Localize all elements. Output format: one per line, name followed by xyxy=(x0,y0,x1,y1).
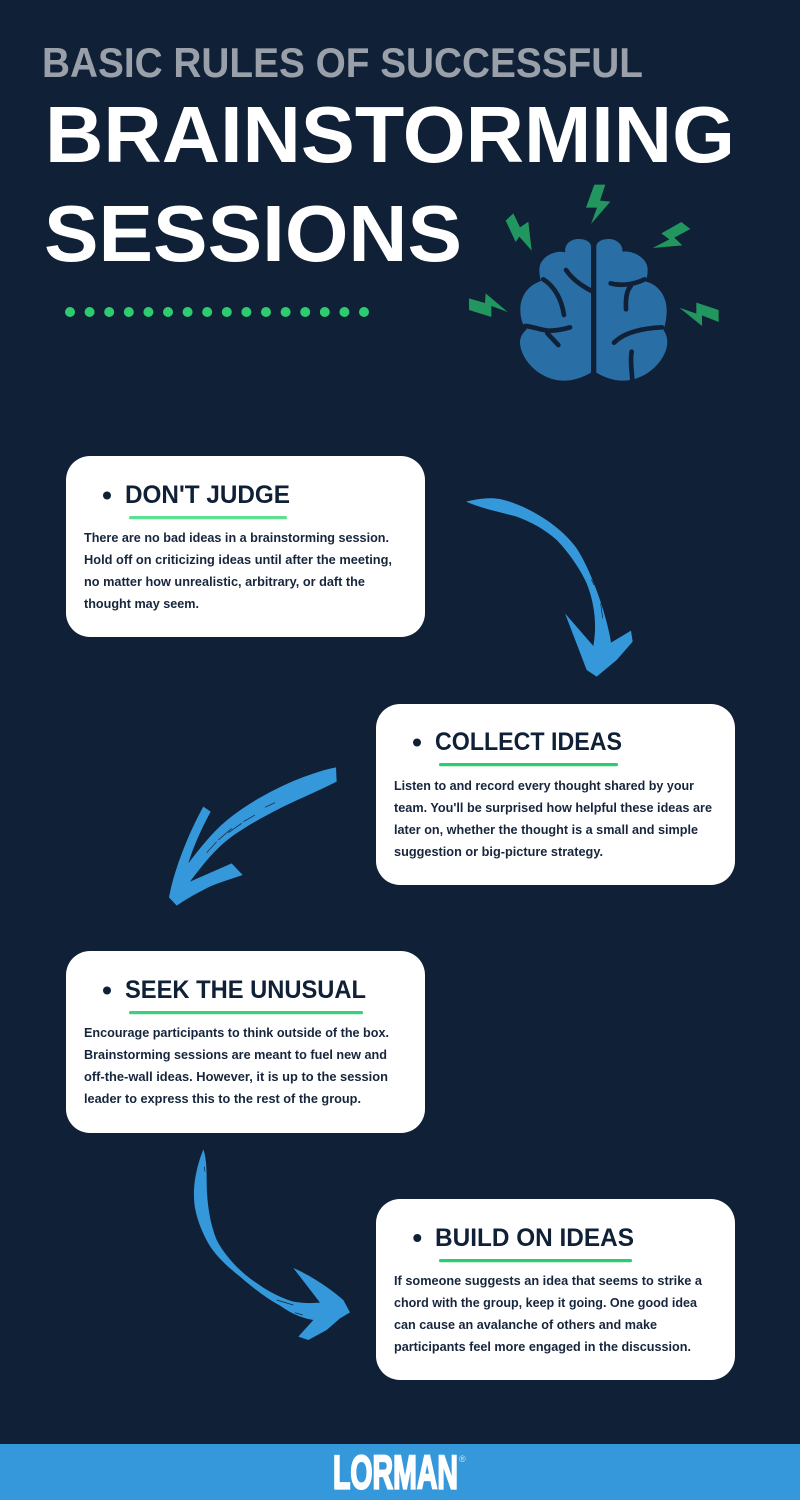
panel: collect ideas xyxy=(376,704,735,885)
title: BRAINSTORMING xyxy=(45,90,735,179)
text: collect ideas: Listen to and record every thought shared by your xyxy=(394,779,694,793)
text: build on ideas: participants feel more engaged in the discussion. xyxy=(394,1340,691,1354)
heading: seek the unusual: SEEK THE UNUSUAL xyxy=(125,976,366,1004)
text: collect ideas xyxy=(394,779,712,859)
panel: seek the unusual xyxy=(66,951,425,1133)
text: collect ideas: suggestion or big-picture strategy. xyxy=(394,845,603,859)
dotted divider xyxy=(65,307,369,317)
title: SESSIONS xyxy=(44,189,462,278)
text: build on ideas: chord with the group, keep it going. One good idea xyxy=(394,1296,698,1310)
text: don't judge: Hold off on criticizing ideas until after the meeting, xyxy=(84,553,392,567)
heading: don't judge: DON'T JUDGE xyxy=(125,481,290,509)
text: seek the unusual xyxy=(84,1026,389,1106)
arrow: to collect ideas xyxy=(466,498,633,677)
text: don't judge: no matter how unrealistic, arbitrary, or daft the xyxy=(84,575,365,589)
arrow: to seek the unusual xyxy=(169,767,337,906)
text: don't judge: thought may seem. xyxy=(84,597,199,611)
panel: build on ideas xyxy=(376,1199,735,1380)
text: build on ideas: If someone suggests an idea that seems to strike a xyxy=(394,1274,703,1288)
text: don't judge xyxy=(84,531,392,611)
footer bar xyxy=(0,1444,800,1500)
title xyxy=(42,39,735,278)
heading: collect ideas: COLLECT IDEAS xyxy=(435,728,622,756)
title: BASIC RULES OF SUCCESSFUL xyxy=(42,39,643,86)
arrow: to build on ideas xyxy=(194,1149,350,1340)
text: build on ideas xyxy=(394,1274,703,1354)
panel: don't judge xyxy=(66,456,425,637)
logo: Lorman: LORMAN xyxy=(333,1446,458,1498)
text: seek the unusual: off-the-wall ideas. However, it is up to the session xyxy=(84,1070,388,1084)
text: build on ideas: can cause an avalanche of others and make xyxy=(394,1318,657,1332)
text: don't judge: There are no bad ideas in a brainstorming session. xyxy=(84,531,389,545)
icon: brain with lightning bolts xyxy=(469,185,719,381)
logo: Lorman xyxy=(333,1446,466,1498)
text: seek the unusual: Brainstorming sessions are meant to fuel new and xyxy=(84,1048,387,1062)
text: seek the unusual: leader to express this to the rest of the group. xyxy=(84,1092,361,1106)
text: collect ideas: later on, whether the thought is a small and simple xyxy=(394,823,698,837)
text: collect ideas: team. You'll be surprised how helpful these ideas are xyxy=(394,801,712,815)
heading: build on ideas: BUILD ON IDEAS xyxy=(435,1224,634,1252)
text: seek the unusual: Encourage participants to think outside of the box. xyxy=(84,1026,389,1040)
logo: Lorman: ® xyxy=(459,1454,466,1464)
